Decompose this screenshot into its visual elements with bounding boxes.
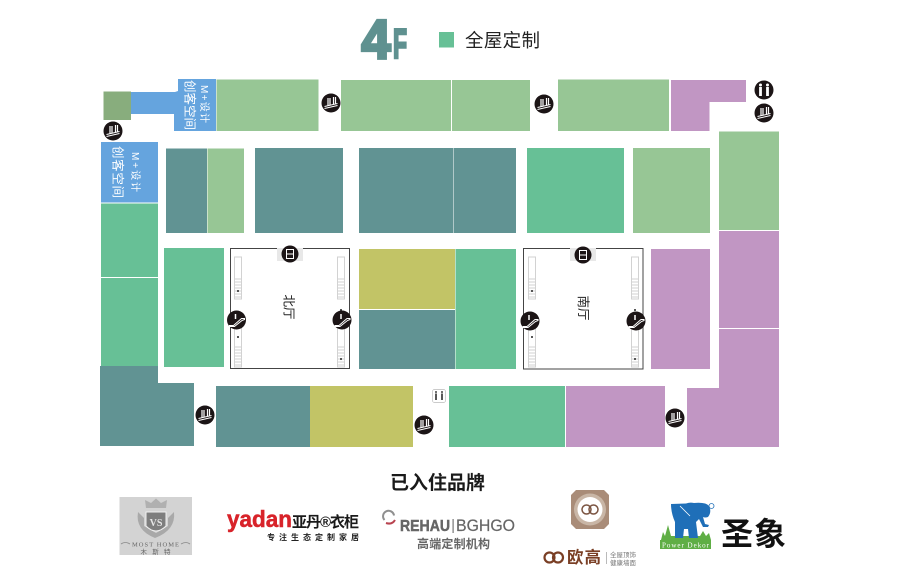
shop: top maker space (131, 79, 216, 131)
shops: left column (100, 204, 194, 446)
title: 4F floor label (362, 8, 407, 70)
shop: left maker space: M+设计 (129, 152, 142, 192)
logo: Ou Gao emblem (571, 490, 609, 529)
logo: Most Home (120, 497, 192, 556)
logo: Ou Gao wordmark: 欧高 (567, 547, 601, 567)
shop: top right purple (671, 80, 746, 131)
logo: REHAU BGHGO: 高端定制机构 (417, 536, 490, 551)
north hall (227, 246, 352, 368)
logo: Most Home: 木斯特 (140, 547, 171, 556)
logo: yadan: yadan (227, 506, 292, 532)
logo: yadan: 亚丹®衣柜 (292, 513, 359, 531)
title: 4F floor label: F (393, 20, 407, 67)
north hall: 北厅 (282, 294, 296, 320)
icon: restroom top right (754, 80, 774, 100)
logo: Power Dekor elephant: Power Dekor (662, 542, 710, 550)
logo: Most Home: VS (150, 518, 163, 529)
icon: restroom bottom (432, 390, 446, 402)
heading: brands: 已入住品牌 (390, 472, 485, 494)
logo: yadan (227, 506, 359, 542)
south hall (520, 246, 646, 369)
icons: stairs (104, 94, 774, 434)
shops: third row (164, 248, 710, 369)
legend: whole-house customization: 全屋定制 (465, 30, 540, 51)
logo: Ou Gao wordmark (544, 547, 636, 567)
logo: Ou Gao wordmark: 健康墙面 (610, 558, 636, 567)
floor plan (100, 79, 779, 447)
shop: left maker space: 创客空间 (110, 146, 126, 198)
shops: right column (687, 132, 779, 447)
shop: corner square (104, 92, 131, 120)
logo: REHAU BGHGO: BGHGO (456, 517, 515, 535)
logo: yadan: 专注生态定制家居 (267, 532, 359, 542)
logo: Most Home: MOST HOME (132, 542, 179, 548)
shop: top maker space: 创客空间 (182, 80, 198, 130)
shop: top maker space: M+设计 (198, 85, 211, 123)
shops: top row (216, 80, 669, 131)
logo: Sheng Xiang wordmark: 圣象 (721, 516, 786, 552)
logo: REHAU BGHGO (383, 511, 515, 551)
shops: bottom row (216, 386, 665, 447)
shops: second row (166, 148, 710, 233)
shop: left maker space (101, 142, 158, 202)
logo: Ou Gao wordmark: 全屋顶饰 (610, 550, 636, 559)
title: 4F floor label: 4 (362, 8, 391, 70)
logo: REHAU BGHGO: REHAU (400, 518, 450, 535)
logo: Power Dekor elephant (660, 503, 714, 550)
south hall: 南厅 (576, 295, 591, 321)
